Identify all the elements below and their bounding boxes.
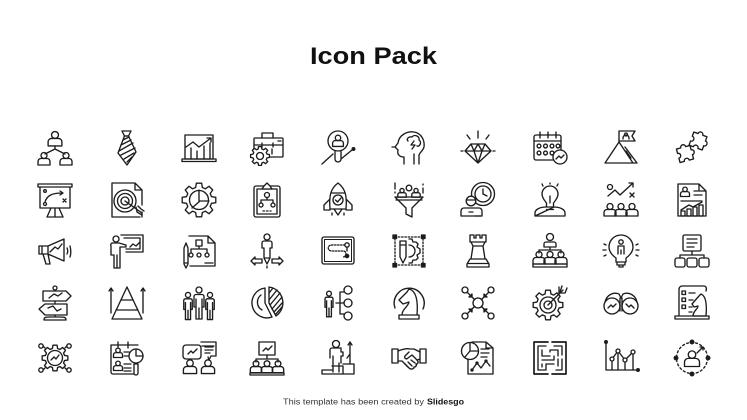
icon: mountain with flag bbox=[605, 131, 637, 163]
icon: checklist with knight bbox=[675, 286, 709, 319]
icon: presenter with board bbox=[111, 235, 143, 268]
icon: maze bbox=[534, 342, 566, 374]
icon: report with pie chart bbox=[462, 342, 493, 374]
icon: person with orbiting nodes bbox=[674, 340, 710, 376]
icon: audience with growth arrow bbox=[604, 183, 638, 216]
icon: head with brain bbox=[392, 132, 424, 164]
icon: person at a crossroads bbox=[251, 234, 283, 268]
icon: gear with connected nodes bbox=[39, 344, 71, 372]
icon: person with options bbox=[325, 286, 352, 320]
icon: rocket bbox=[324, 183, 352, 215]
icon: necktie bbox=[118, 131, 136, 165]
icon: calendar profiles with magnifier bbox=[111, 342, 143, 375]
icon: person in circle with rising arrow bbox=[322, 131, 355, 164]
icon: calendar with chart badge bbox=[534, 132, 567, 164]
icon: chess rook bbox=[467, 235, 489, 267]
icon: target document bbox=[112, 183, 144, 217]
icon: gear with pie chart bbox=[182, 183, 216, 217]
icon: puzzle pieces bbox=[676, 130, 710, 163]
icon: chess knight bbox=[394, 288, 424, 319]
title: Icon Pack bbox=[310, 43, 438, 70]
icon: gear target with dart bbox=[533, 286, 567, 320]
icon: binoculars bbox=[604, 293, 638, 314]
icon: route map frame bbox=[322, 237, 354, 264]
icon: team presentation org chart bbox=[250, 342, 284, 375]
icon: pie chart with hatched slice bbox=[252, 287, 283, 318]
icon: funnel with people bbox=[395, 183, 423, 217]
footer credit bbox=[283, 398, 464, 406]
icon: document with org chart and pencil bbox=[184, 236, 215, 268]
icon: team of three bbox=[184, 287, 214, 320]
icon: hub network bbox=[462, 287, 494, 319]
footer credit: Slidesgo bbox=[427, 398, 464, 406]
icon: people hierarchy bbox=[38, 132, 72, 165]
icon: strategy board bbox=[38, 184, 72, 217]
icon: laptop growth chart bbox=[182, 135, 216, 162]
icon: line chart bbox=[605, 341, 639, 371]
icon: person climbing steps bbox=[322, 340, 354, 374]
icon: megaphone bbox=[39, 239, 71, 264]
icon: pyramid with up arrows bbox=[109, 287, 145, 319]
icon: person with idea bulb bbox=[535, 183, 565, 216]
icon: two people discussing charts bbox=[183, 342, 216, 374]
footer credit: This template has been created by bbox=[283, 398, 424, 406]
icon: diamond bbox=[461, 131, 495, 163]
icon: team pyramid hierarchy bbox=[533, 234, 567, 267]
icon: handshake bbox=[392, 349, 426, 369]
icon: clipboard with org chart bbox=[254, 183, 280, 217]
icon: briefcase with gear bbox=[251, 133, 283, 165]
icon: document organisation chart bbox=[675, 235, 709, 267]
icon: design gear and pencil bbox=[393, 235, 425, 267]
icon: profile report bbox=[678, 184, 706, 216]
icon: person inside light bulb bbox=[603, 235, 639, 267]
icon: person with clock bbox=[461, 182, 494, 216]
icon: signposts bbox=[39, 286, 71, 320]
